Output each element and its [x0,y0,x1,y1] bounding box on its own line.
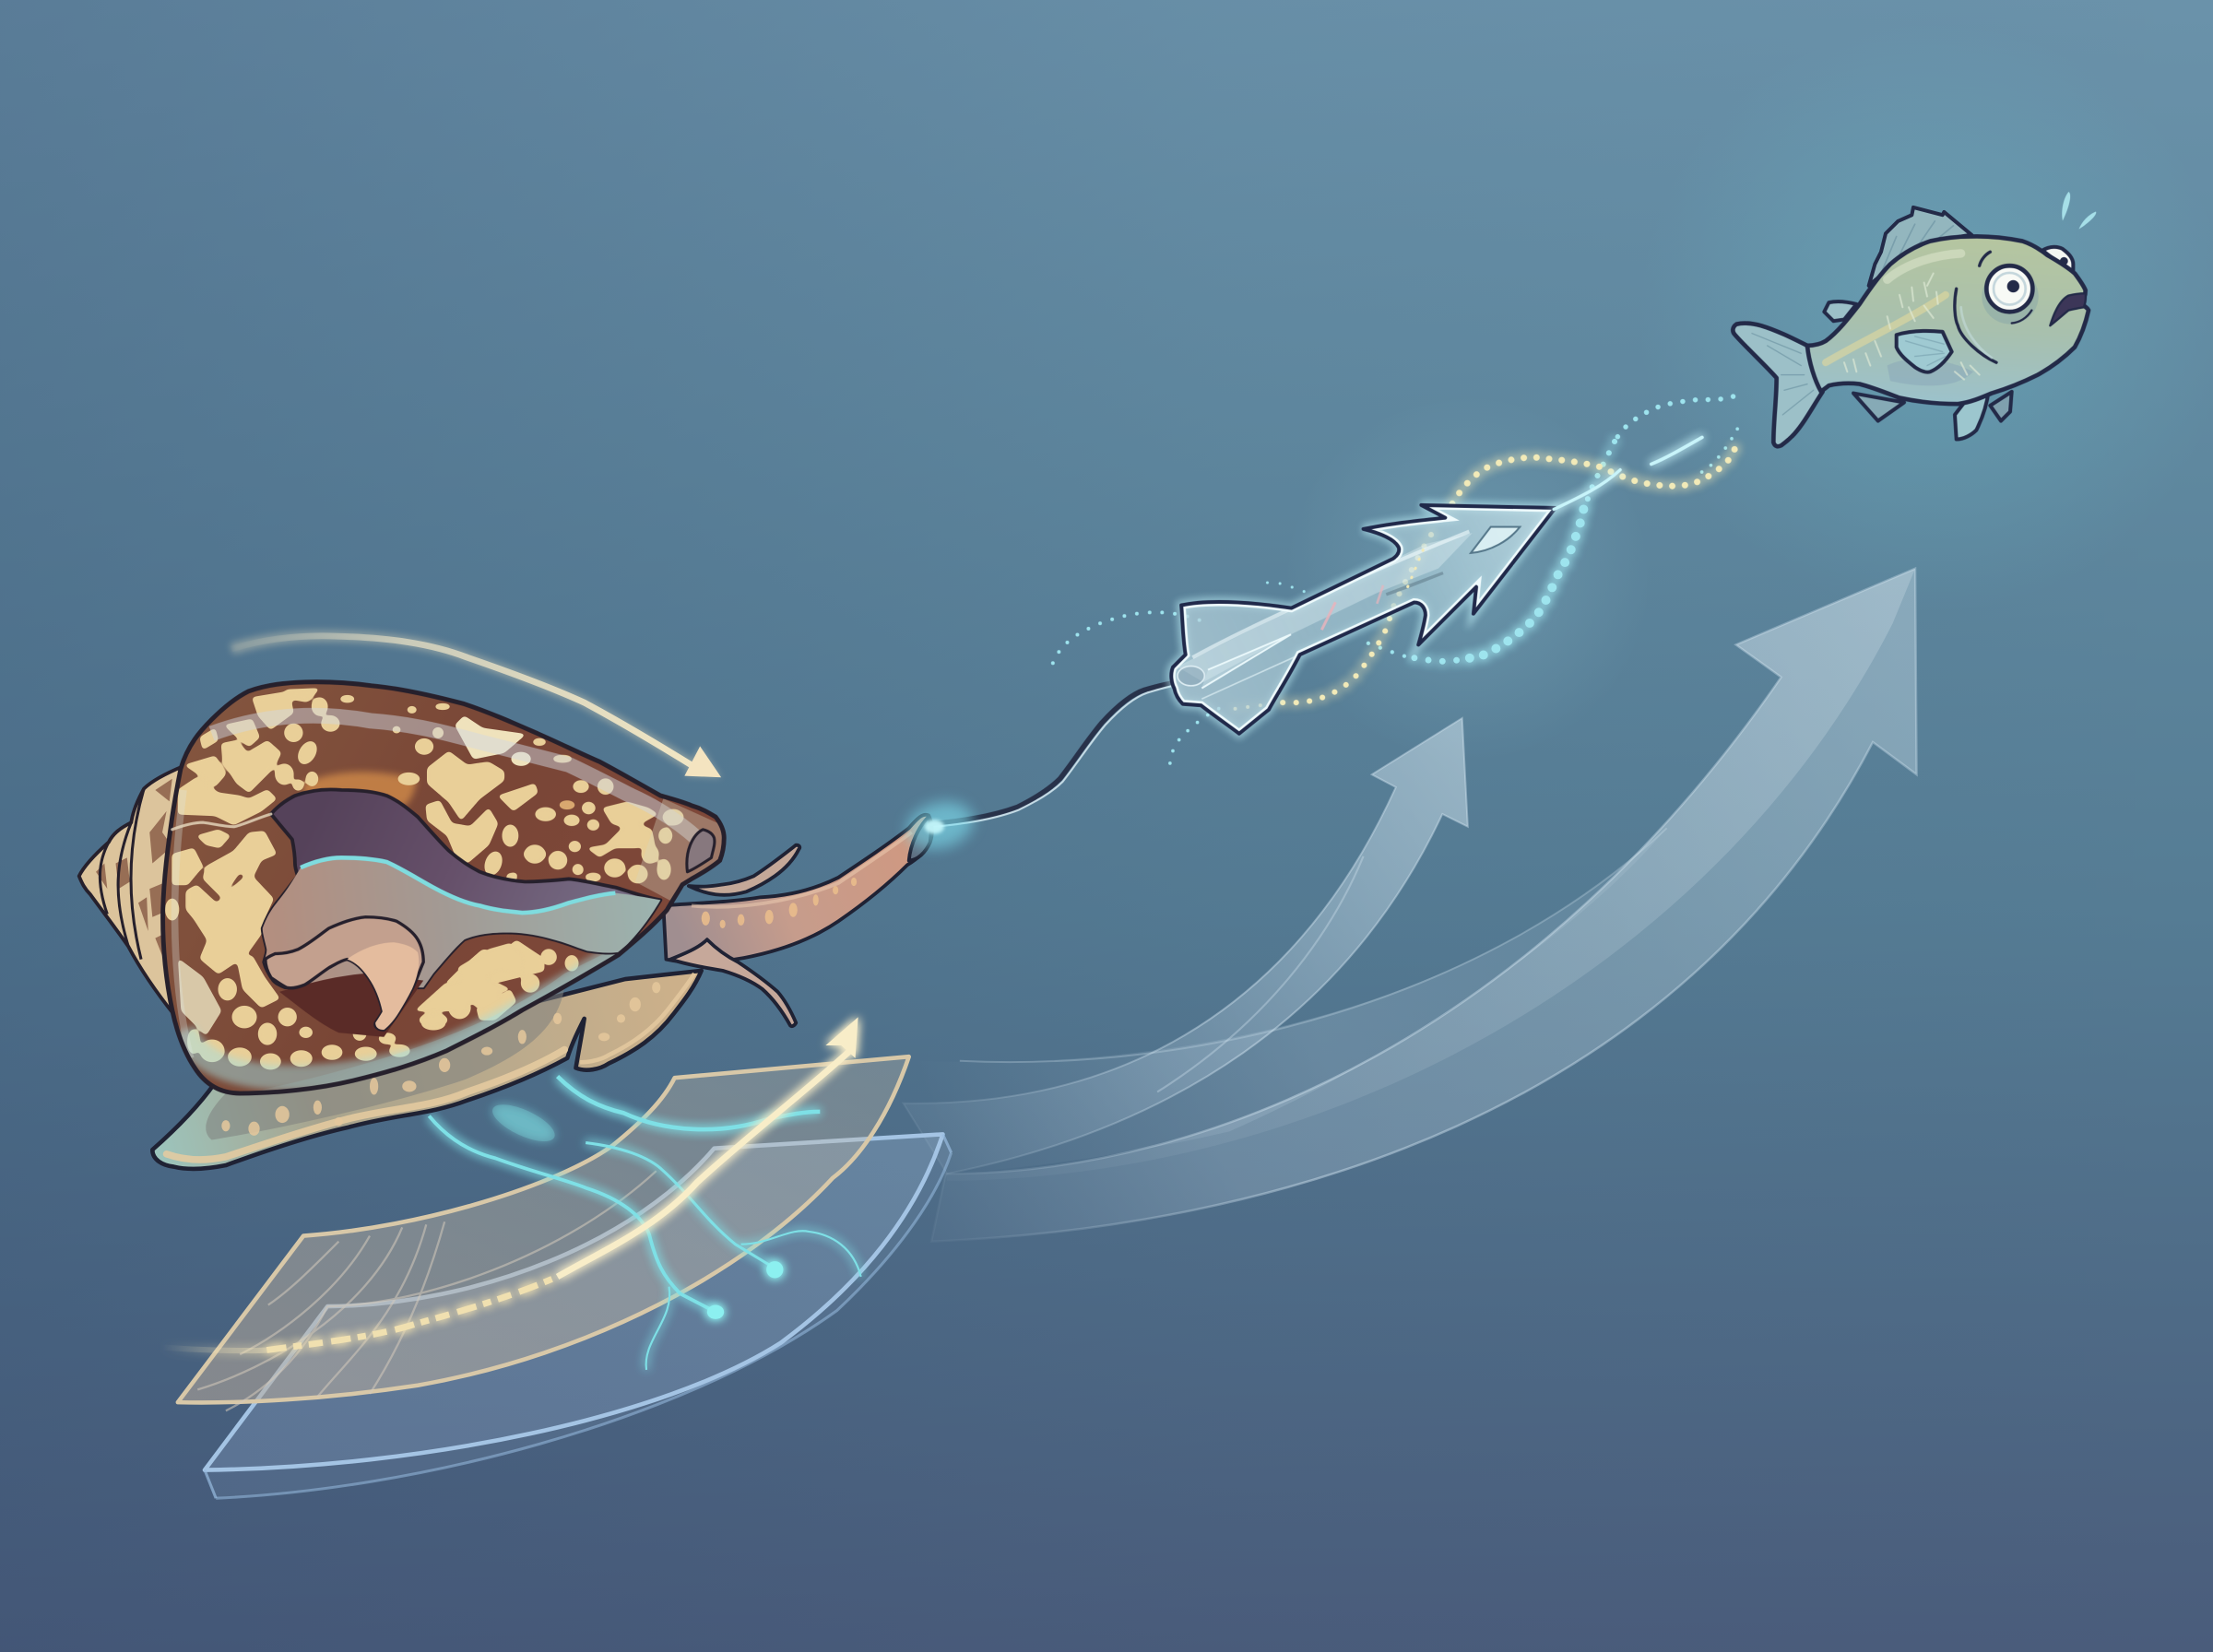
near eye [1986,266,2032,312]
lateral stripe [1826,295,1946,362]
harpoon white inner rim [1171,505,1556,734]
harpoon dark outline [1171,505,1556,734]
upper tan curved sheet with guide lines [178,1056,909,1410]
harpoon glass fill [1171,505,1556,734]
left white edge gloss [175,790,191,1058]
tail fin [1733,324,1823,446]
proboscis [663,815,932,962]
folded pink siphon [266,917,423,1030]
shell outline and lip lines [163,682,724,1093]
glow at proboscis tip [902,795,978,856]
pectoral fin [1897,331,1952,372]
body [1807,236,2089,404]
ribbon sweeping into the big arrow [917,828,1667,1174]
brow [1980,252,1990,266]
fish alarm marks [2062,192,2096,230]
pale flare at shell end [635,798,723,903]
cream islands traced from the shell, right section [415,738,683,1027]
mouth [2050,293,2086,325]
dark flesh patch [279,974,423,1037]
cream islands traced from the shell, left section [165,689,552,1069]
shell aperture dark interior [263,789,660,987]
belly shadow [1888,359,1973,385]
teal dotted venom trail [1053,396,1737,763]
energy spark from harpoon tip [1554,437,1702,509]
far ventral fin [1990,392,2012,421]
gill highlight [1961,307,1992,358]
harpoon outer glow [1171,505,1556,734]
harpoon tube [931,683,1174,827]
snail foot [152,971,702,1169]
under-eye line [2012,311,2031,324]
lower tentacle [670,939,796,1026]
upper tentacle [689,845,799,895]
ventral fin right [1955,390,1989,440]
far eye [2042,247,2073,274]
lower blue curved sheet [205,1134,952,1498]
big rising arrow [931,569,1917,1242]
yellow dotted venom trail [1228,442,1737,710]
cream arc arrow line and head [231,636,721,777]
teal band following shell base [183,948,628,1078]
harpoon inner details [1178,527,1520,699]
yellow rising dashed arrow [160,1017,858,1351]
ventral fin left [1853,394,1904,421]
glass harpoon [1171,505,1556,734]
dorsal fin [1869,207,1971,286]
back highlight [1888,254,1961,279]
small back fin [1824,301,1856,321]
fish [1733,207,2089,446]
orange inner band [303,772,417,807]
medium rising arrow [904,718,1468,1174]
shell spire [79,766,197,1016]
scale marks [1844,274,1980,380]
eye socket shadow [1982,269,2039,324]
glossy pale band [212,715,705,846]
mantle below teal line [263,857,660,987]
glowing nerve endpoints [707,1261,783,1319]
teal nerve lines [429,1077,861,1370]
teal tint along lower shell [260,954,615,1091]
gill line [1955,289,1996,362]
shell body pattern [165,684,722,1092]
cream arc arrow glow [231,636,721,777]
